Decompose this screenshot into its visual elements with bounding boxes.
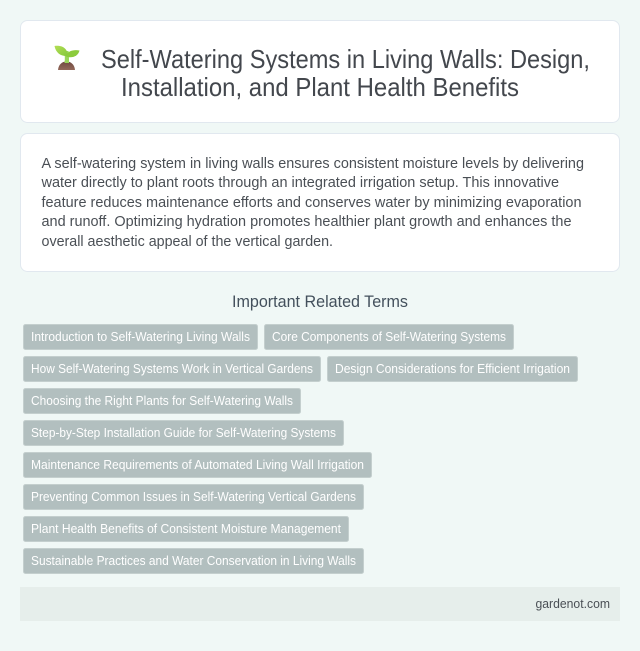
tag <box>24 356 320 382</box>
text block: description <box>41 156 584 250</box>
text block: description: feature reduces maintenance efforts and conserves water by minimizing evaporation <box>42 195 582 211</box>
text block: description: and runoff. Optimizing hydration promotes healthier plant growth and enhances the <box>42 214 572 230</box>
tag: Design Considerations for Efficient Irrigation <box>335 362 570 376</box>
tag: Step-by-Step Installation Guide for Self-Watering Systems <box>31 426 336 440</box>
tag: Core Components of Self-Watering Systems <box>272 330 506 344</box>
footer: gardenot.com <box>536 597 610 611</box>
panel: description card <box>20 134 620 272</box>
icon: sprout <box>54 46 80 70</box>
tag <box>328 356 578 382</box>
tag: Preventing Common Issues in Self-Watering Vertical Gardens <box>31 490 356 504</box>
text block: description: overall aesthetic appeal of the vertical garden. <box>42 234 333 250</box>
text block: description: water directly to plant roots through an integrated irrigation setup. This innovative <box>41 175 559 191</box>
tag: Choosing the Right Plants for Self-Watering Walls <box>31 394 293 408</box>
text block: description: A self-watering system in living walls ensures consistent moisture levels by delivering <box>42 156 584 172</box>
tag <box>24 548 364 574</box>
tag: How Self-Watering Systems Work in Vertical Gardens <box>31 362 313 376</box>
tag <box>24 324 258 350</box>
tag: Sustainable Practices and Water Conservation in Living Walls <box>31 554 356 568</box>
title <box>101 46 590 102</box>
tag <box>24 388 300 414</box>
tag <box>24 452 372 478</box>
tag <box>24 420 344 446</box>
tag <box>24 516 348 542</box>
title: Self-Watering Systems in Living Walls: Design, <box>101 46 590 74</box>
panel: title card <box>20 20 620 122</box>
tag: Introduction to Self-Watering Living Walls <box>31 330 250 344</box>
panel: related term tags <box>24 324 578 574</box>
tag <box>24 484 364 510</box>
tag <box>264 324 514 350</box>
title: Installation, and Plant Health Benefits <box>121 74 519 102</box>
footer <box>20 587 620 621</box>
tag: Maintenance Requirements of Automated Living Wall Irrigation <box>31 458 364 472</box>
heading: related terms: Important Related Terms <box>232 293 408 311</box>
tag: Plant Health Benefits of Consistent Moisture Management <box>31 522 341 536</box>
